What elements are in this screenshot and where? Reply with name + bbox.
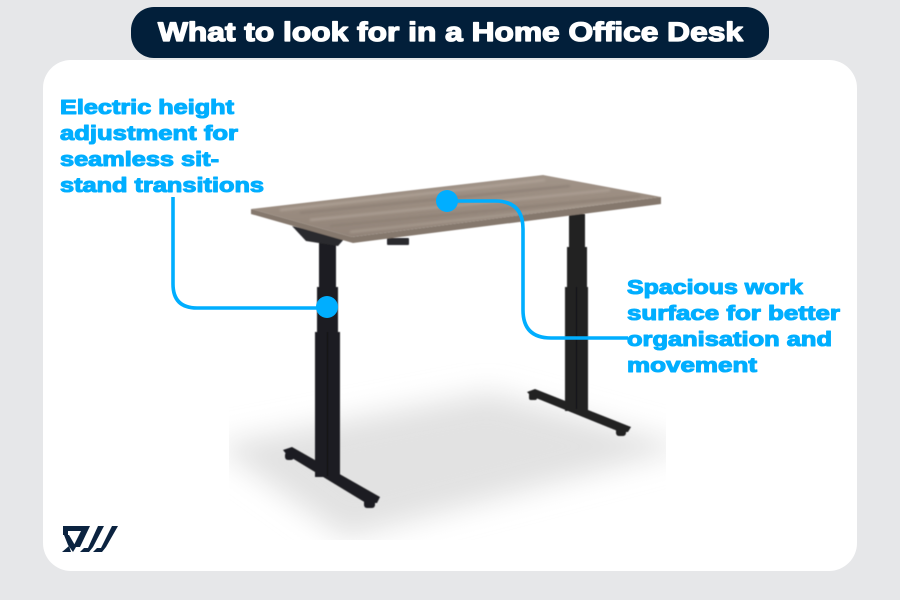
icon: logo [62, 526, 118, 552]
callout text: electric height adjustment [60, 96, 264, 197]
callout text: electric height adjustment: seamless sit- [60, 148, 219, 171]
left leg [283, 240, 380, 508]
callout dot: leg [316, 296, 338, 318]
callout text: spacious work surface: movement [627, 354, 757, 377]
callout text: spacious work surface: surface for better [627, 302, 840, 325]
callout line: height adjustment [173, 197, 327, 308]
desktop edge [251, 197, 661, 243]
callout text: spacious work surface: Spacious work [627, 276, 804, 299]
callout text: electric height adjustment: Electric height [60, 96, 234, 119]
right leg [527, 214, 631, 436]
under-desk bracket and control [292, 226, 409, 246]
callout dot: desktop [436, 190, 458, 212]
callout text: spacious work surface [627, 276, 840, 377]
panel: white card [43, 60, 857, 571]
callout text: spacious work surface: organisation and [627, 328, 832, 351]
callout line: work surface [447, 201, 628, 338]
desk illustration [251, 175, 661, 508]
desktop surface [251, 175, 661, 237]
floor shadow [215, 392, 690, 538]
callout text: electric height adjustment: stand transitions [60, 174, 264, 197]
title banner [131, 7, 769, 58]
callout text: electric height adjustment: adjustment for [60, 122, 238, 145]
title banner: What to look for in a Home Office Desk [158, 17, 743, 47]
